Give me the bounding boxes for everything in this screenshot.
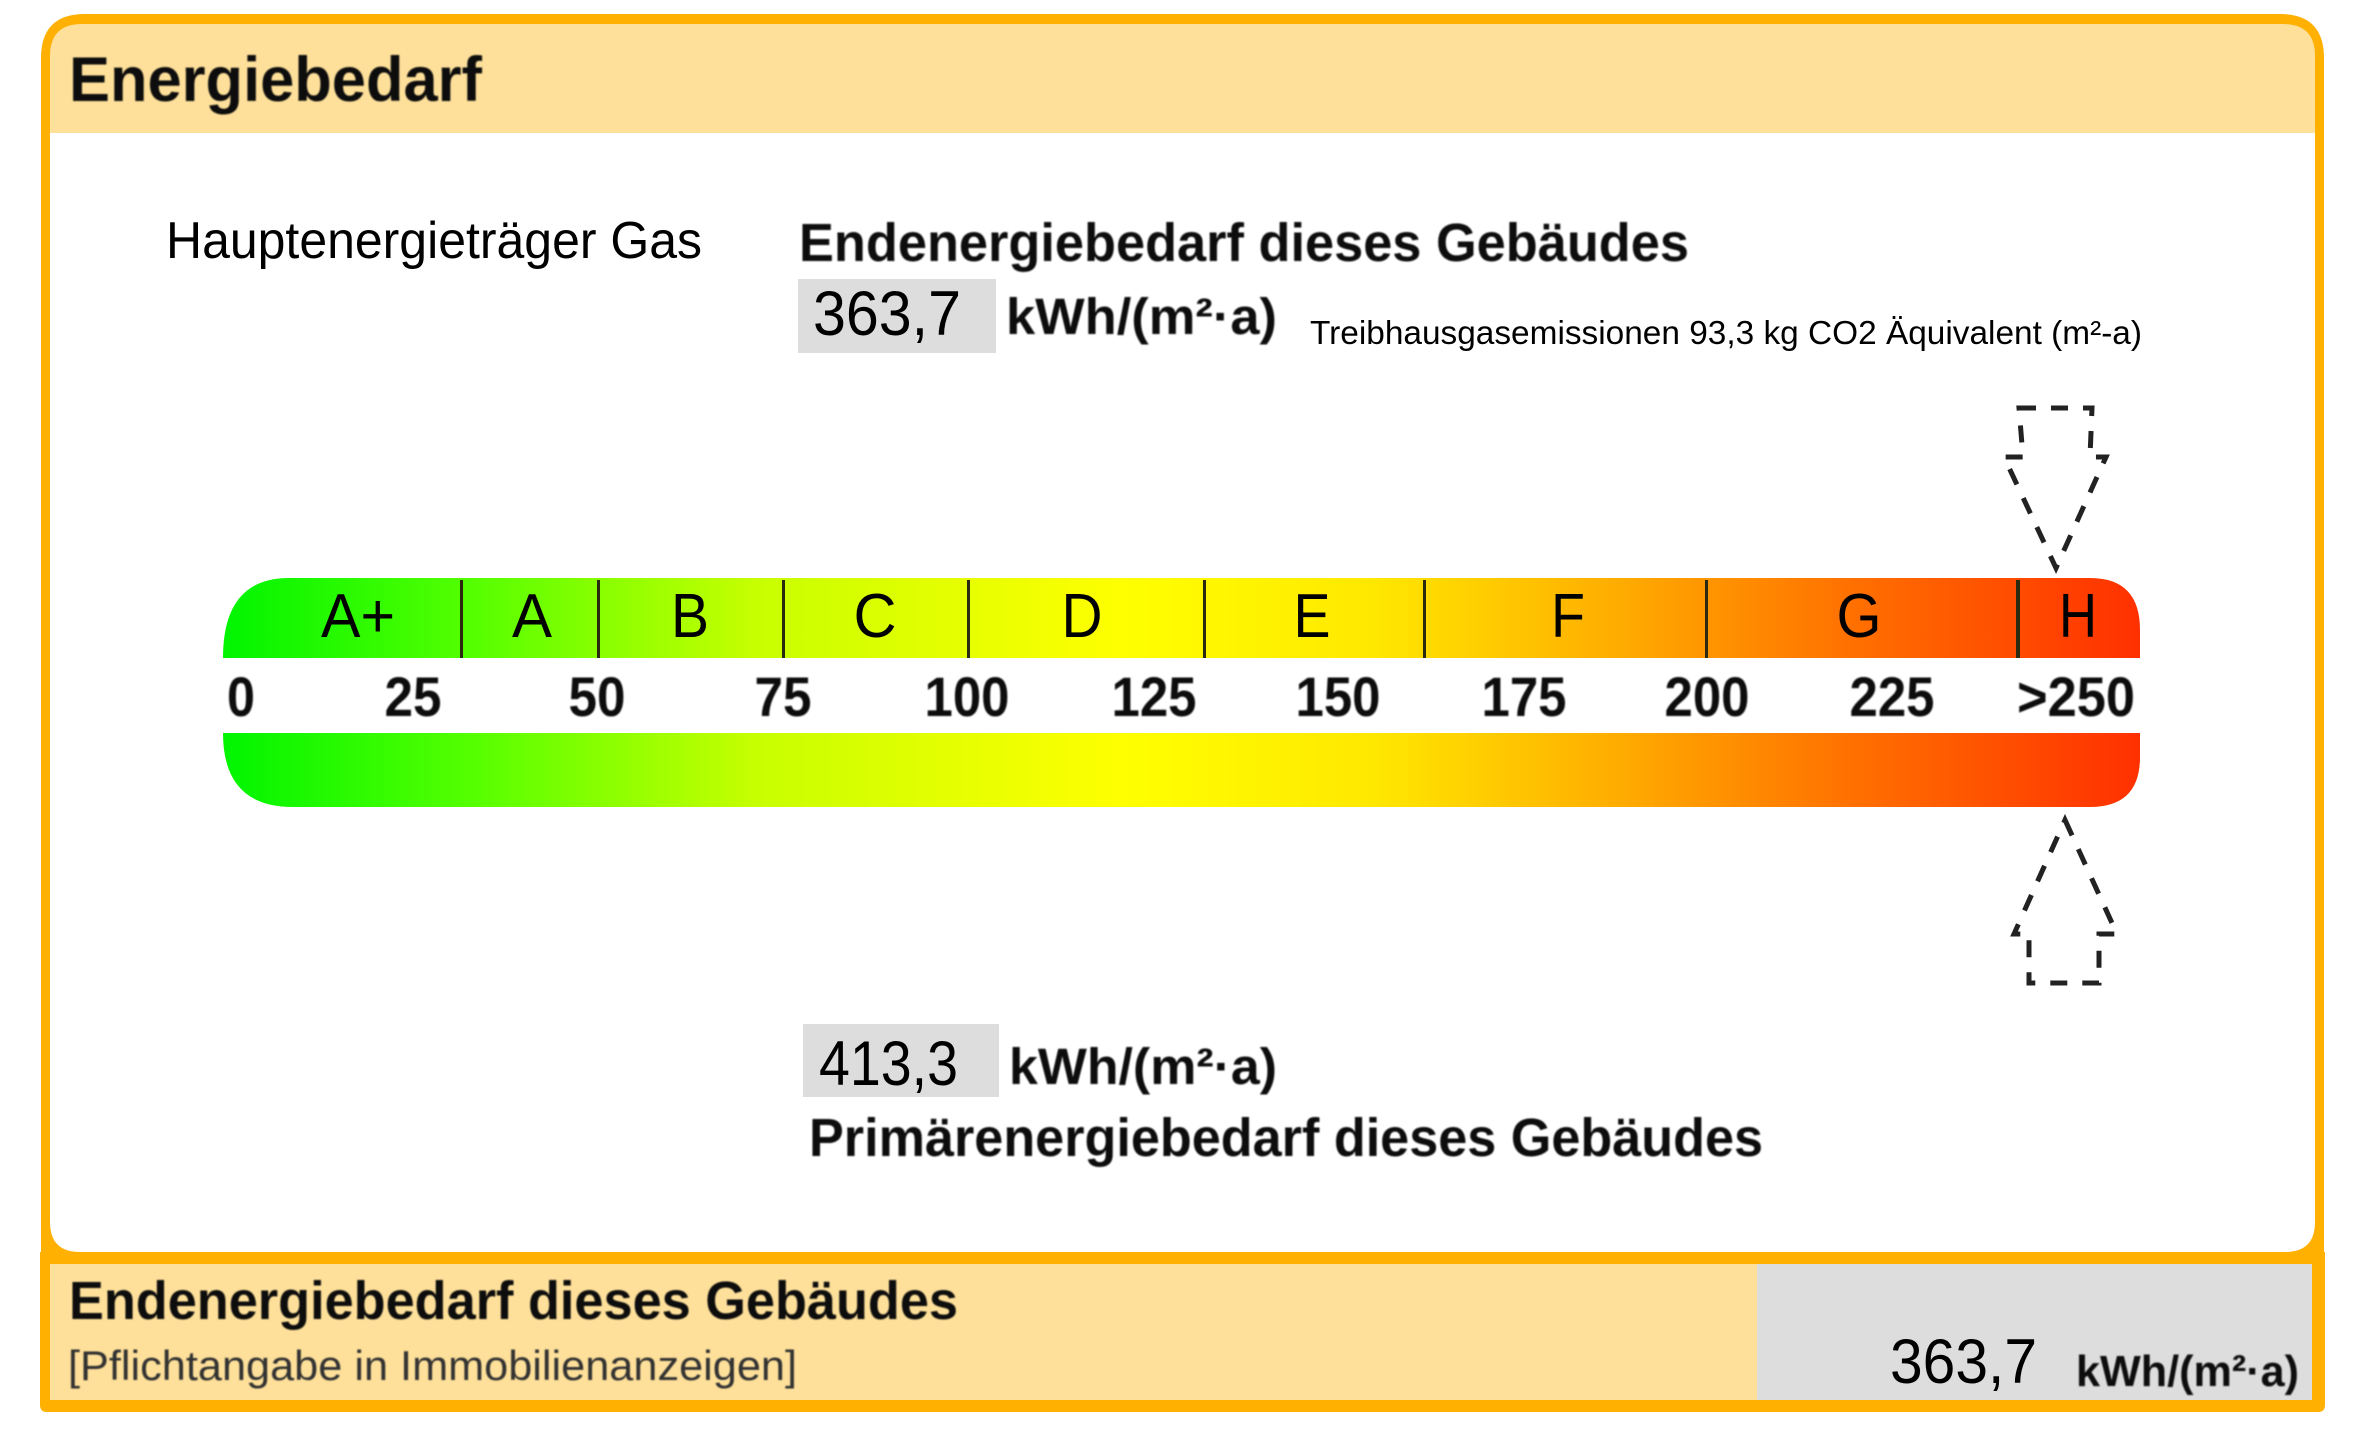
footer note: [Pflichtangabe in Immobilienanzeigen]: [68, 1342, 797, 1389]
chart: energy class scale: [223, 578, 2140, 807]
title: Energiebedarf: [69, 45, 483, 115]
scale numbers: 200: [1664, 665, 1750, 728]
class letters: D: [1062, 582, 1102, 651]
gradient bar: [223, 733, 2140, 807]
scale numbers: 75: [754, 665, 812, 728]
scale numbers: 0: [227, 665, 255, 728]
class letters: G: [1836, 582, 1882, 651]
final energy heading: Endenergiebedarf dieses Gebäudes: [799, 213, 1689, 273]
arrow: primary energy marker: [2014, 820, 2117, 983]
final energy value: 363,7: [813, 279, 961, 349]
footer value: 363,7: [1890, 1327, 2037, 1397]
scale numbers: 150: [1296, 665, 1380, 728]
primary energy value: 413,3: [819, 1029, 958, 1099]
primary energy heading: Primärenergiebedarf dieses Gebäudes: [809, 1108, 1763, 1168]
primary energy value: [803, 1024, 1277, 1099]
class letters: A: [512, 582, 553, 651]
class letters: [321, 582, 2097, 651]
footer heading: Endenergiebedarf dieses Gebäudes: [69, 1271, 958, 1331]
scale numbers: >250: [2017, 665, 2135, 728]
class dividers: [460, 580, 2020, 658]
scale numbers: 125: [1112, 665, 1196, 728]
arrow: final energy marker: [2004, 408, 2106, 568]
primary energy value: kWh/(m²·a): [1009, 1038, 1277, 1095]
greenhouse gas emissions note: Treibhausgasemissionen 93,3 kg CO2 Äquivalent (m²-a): [1310, 314, 2142, 351]
scale numbers: 175: [1482, 665, 1566, 728]
class letters: E: [1294, 582, 1330, 651]
class bar: [223, 578, 2140, 658]
final energy value: kWh/(m²·a): [1006, 288, 1277, 345]
footer unit: kWh/(m²·a): [2076, 1347, 2299, 1396]
scale numbers: 25: [384, 665, 442, 728]
scale numbers: 100: [924, 665, 1010, 728]
header band: [50, 24, 2315, 133]
class letters: C: [854, 582, 896, 651]
scale numbers: 50: [568, 665, 626, 728]
final energy value: [798, 279, 1277, 353]
scale numbers: [227, 665, 2135, 728]
main energy carrier label: Hauptenergieträger Gas: [166, 212, 702, 270]
class letters: A+: [321, 582, 395, 651]
scale numbers: 225: [1850, 665, 1934, 728]
class letters: B: [671, 582, 709, 651]
class letters: H: [2059, 582, 2097, 651]
class letters: F: [1551, 582, 1585, 651]
panel: mandatory statement footer: [40, 1252, 2325, 1412]
